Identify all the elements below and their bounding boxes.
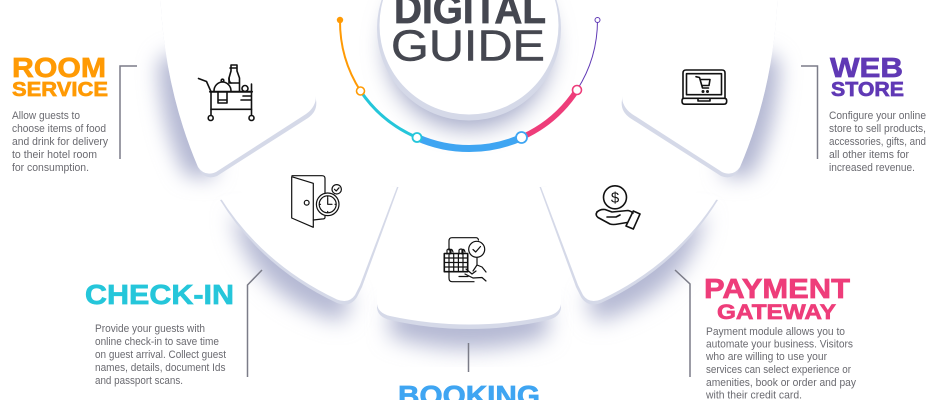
heading: payment gateway: PAYMENT [704, 273, 850, 304]
title: digital guide: GUIDE [391, 22, 545, 70]
connector: room service [120, 66, 137, 159]
text: check-in: on guest arrival. Collect guest [95, 349, 226, 361]
icon: booking calendar [444, 238, 486, 282]
text: payment gateway [705, 326, 857, 400]
text: web store: store to sell products, [829, 123, 926, 135]
heading: web store: WEB [830, 52, 903, 83]
text: check-in [95, 323, 226, 387]
text: room service [12, 110, 109, 174]
text: room service: choose items of food [12, 123, 106, 135]
heading: room service: SERVICE [12, 78, 108, 101]
text: payment gateway: amenities, book or order and pay [706, 377, 857, 389]
arc timeline [337, 17, 600, 149]
text: web store: Configure your online [829, 110, 926, 122]
connector: payment gateway [675, 270, 690, 377]
panel: web store [622, 0, 780, 178]
text: payment gateway: automate your business. Visitors [706, 338, 854, 350]
panel: booking [377, 270, 561, 349]
text: payment gateway: Payment module allows you to [706, 326, 845, 338]
center badge [377, 0, 561, 130]
text: room service: and drink for delivery [12, 136, 109, 148]
text: check-in: names, details, document Ids [95, 362, 226, 374]
text: web store: increased revenue. [829, 162, 915, 174]
connector: web store [801, 66, 818, 159]
text: web store: all other items for [829, 149, 909, 161]
text: room service: Allow guests to [12, 110, 80, 122]
heading: web store [830, 52, 904, 101]
heading: room service [12, 52, 108, 101]
heading: web store: STORE [831, 78, 904, 101]
panel: payment gateway [540, 180, 718, 322]
text: check-in: and passport scans. [95, 375, 183, 387]
text: web store [829, 110, 926, 174]
title: digital guide [391, 0, 546, 70]
panel: room service [158, 0, 316, 178]
text: web store: accessories, gifts, and [829, 136, 926, 148]
text: check-in: online check-in to save time [95, 336, 219, 348]
icon: hand with coin: $ [611, 190, 620, 206]
heading: payment gateway: GATEWAY [717, 300, 836, 324]
heading: payment gateway [704, 273, 850, 324]
heading: room service: ROOM [12, 52, 106, 83]
icon: room service cart [198, 65, 254, 120]
text: payment gateway: services can select experience or [706, 364, 851, 376]
text: room service: to their hotel room [12, 149, 97, 161]
icon: hand with coin [596, 186, 640, 229]
connector: booking [468, 343, 470, 372]
text: payment gateway: who are willing to use your [705, 351, 827, 363]
icon: laptop with cart [682, 70, 727, 104]
connector: check-in [248, 270, 262, 377]
text: room service: for consumption. [12, 162, 89, 174]
icon: door with clock [292, 176, 341, 227]
panel: check-in [220, 180, 398, 322]
heading: check-in: CHECK-IN [85, 279, 234, 310]
text: check-in: Provide your guests with [95, 323, 205, 335]
